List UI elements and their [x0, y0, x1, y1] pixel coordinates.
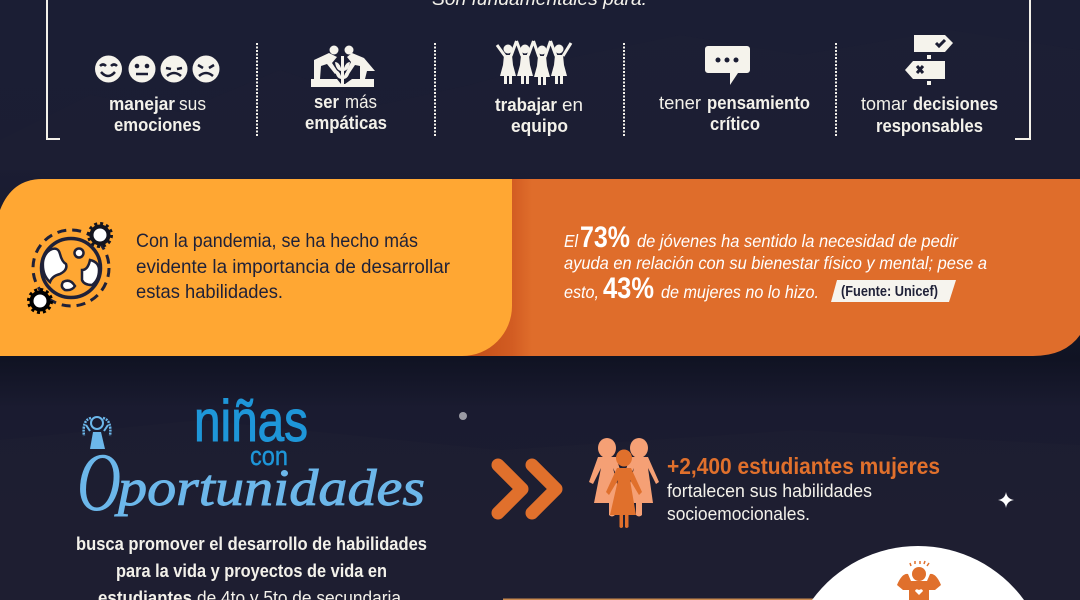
pandemic text: Con la pandemia, se ha hecho más [136, 230, 418, 252]
label: ser [314, 91, 339, 112]
skill: tener pensamiento crítico [659, 46, 810, 134]
arrow: double chevron [498, 465, 556, 513]
logo: niñas con oportunidades: niñas [194, 389, 308, 454]
label: más [345, 91, 377, 112]
pandemic text: evidente la importancia de desarrollar [136, 256, 450, 278]
icon: three women [589, 438, 659, 528]
statistic text: 73% [580, 221, 630, 254]
statistic text [564, 221, 987, 305]
icon: girl with braids [84, 417, 110, 449]
label: responsables [876, 115, 983, 136]
label [861, 93, 998, 136]
label [305, 91, 387, 133]
decoration: grey dot [459, 412, 467, 420]
label: empáticas [305, 112, 387, 133]
label: pensamiento [707, 92, 810, 113]
decoration: star [998, 492, 1014, 508]
pandemic text: estas habilidades. [136, 281, 283, 303]
white circle with icon [812, 546, 1024, 600]
students statistic: fortalecen sus habilidades [667, 480, 872, 501]
statistic text: El [564, 231, 579, 251]
label: equipo [511, 115, 568, 136]
logo: niñas con oportunidades: portunidades [114, 460, 425, 517]
fold shadow [462, 179, 532, 356]
statistic text: 43% [603, 272, 654, 305]
statistic text: ayuda en relación con su bienestar físico y mental; pese a [564, 253, 987, 273]
students statistic: socioemocionales. [667, 503, 810, 524]
skill: ser más empáticas [305, 46, 387, 133]
label: emociones [114, 114, 201, 135]
program description: busca promover el desarrollo de habilidades [76, 533, 427, 554]
statistic text: de mujeres no lo hizo. [661, 282, 819, 302]
skill: manejar sus emociones [95, 56, 220, 135]
panel: skills frame [47, 0, 1030, 139]
label: en [562, 94, 583, 115]
label: crítico [710, 113, 760, 134]
icon: four women with raised arms [497, 41, 571, 85]
icon: people tending a plant [311, 46, 375, 87]
bottom card edge [503, 598, 815, 600]
logo: niñas con oportunidades: O [77, 436, 121, 529]
source tag [831, 280, 956, 302]
panel: orange statistics band [462, 179, 1080, 356]
frame lines [47, 0, 1030, 139]
pandemic text [136, 230, 450, 303]
label: trabajar [495, 94, 557, 115]
logo: niñas con oportunidades [77, 389, 425, 529]
icon: globe with viruses [28, 224, 112, 312]
skill: trabajar en equipo [495, 41, 583, 136]
label: tomar [861, 93, 907, 114]
label [109, 93, 206, 135]
label [659, 92, 810, 134]
students statistic [667, 453, 940, 524]
logo: niñas con oportunidades: con [250, 441, 288, 471]
program description: para la vida y proyectos de vida en [116, 560, 387, 581]
source tag: (Fuente: Unicef) [841, 284, 938, 300]
students statistic: +2,400 estudiantes mujeres [667, 453, 940, 479]
label [495, 94, 583, 136]
icon: person with heart [897, 561, 941, 600]
panel: yellow pandemic band [0, 179, 512, 356]
statistic text: esto, [564, 282, 599, 302]
label: manejar [109, 93, 175, 114]
skill: tomar decisiones responsables [861, 35, 998, 136]
label: tener [659, 92, 701, 113]
icon: direction signpost [905, 35, 953, 85]
label: sus [179, 93, 206, 114]
statistic text: de jóvenes ha sentido la necesidad de pedir [637, 231, 959, 251]
label: decisiones [913, 93, 998, 114]
dotted dividers [257, 43, 836, 136]
icon: speech bubble [705, 46, 750, 85]
program description [76, 533, 427, 600]
icon: four emotion faces [95, 56, 220, 82]
